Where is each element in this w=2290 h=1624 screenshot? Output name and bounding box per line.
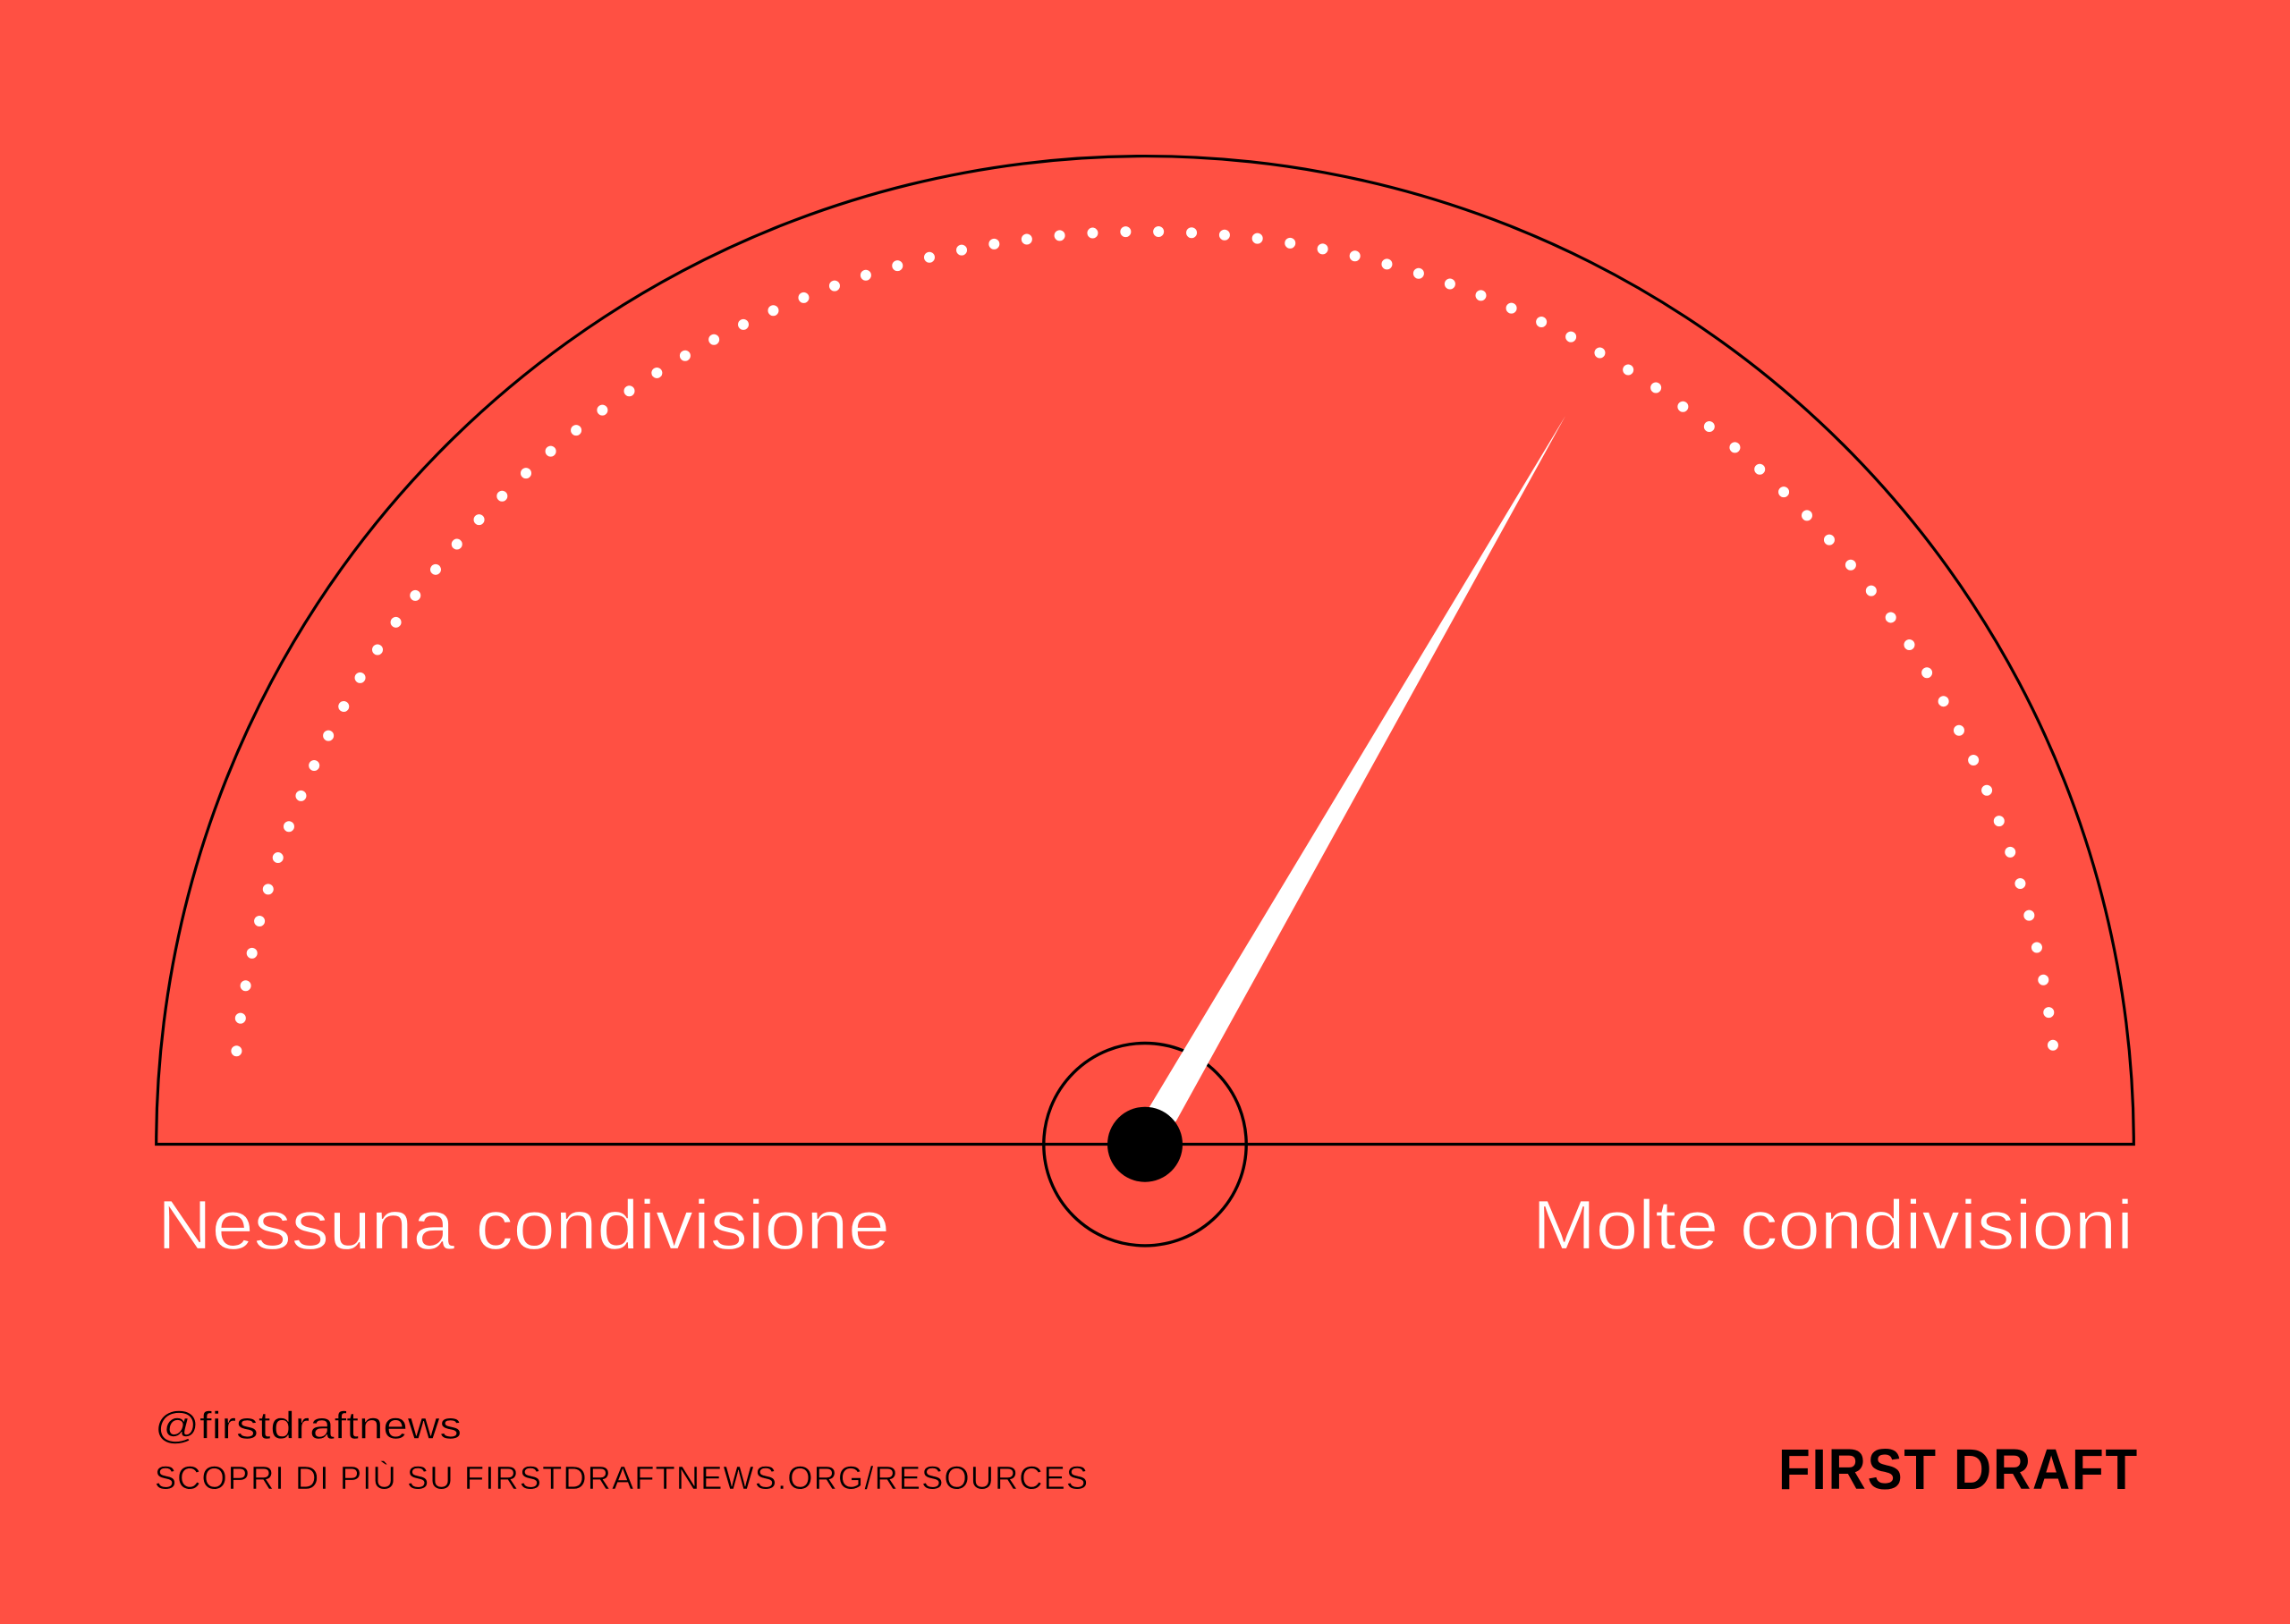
hub outer ring xyxy=(1044,1043,1246,1246)
social handle: @firstdraftnews xyxy=(155,1404,462,1447)
gauge dotted scale xyxy=(236,232,2053,1051)
needle xyxy=(1149,416,1565,1145)
logo wordmark: FIRST DRAFT xyxy=(1778,1437,2139,1501)
gauge outline: semicircle and baseline xyxy=(157,156,2133,1144)
resources link: SCOPRI DI PIÙ SU FIRSTDRAFTNEWS.ORG/RESOURCES xyxy=(155,1459,1088,1496)
scale label: right: Molte condivisioni xyxy=(1532,1186,2133,1265)
gauge xyxy=(157,156,2133,1246)
scale label: left: Nessuna condivisione xyxy=(157,1186,890,1265)
hub centre xyxy=(1107,1107,1183,1182)
